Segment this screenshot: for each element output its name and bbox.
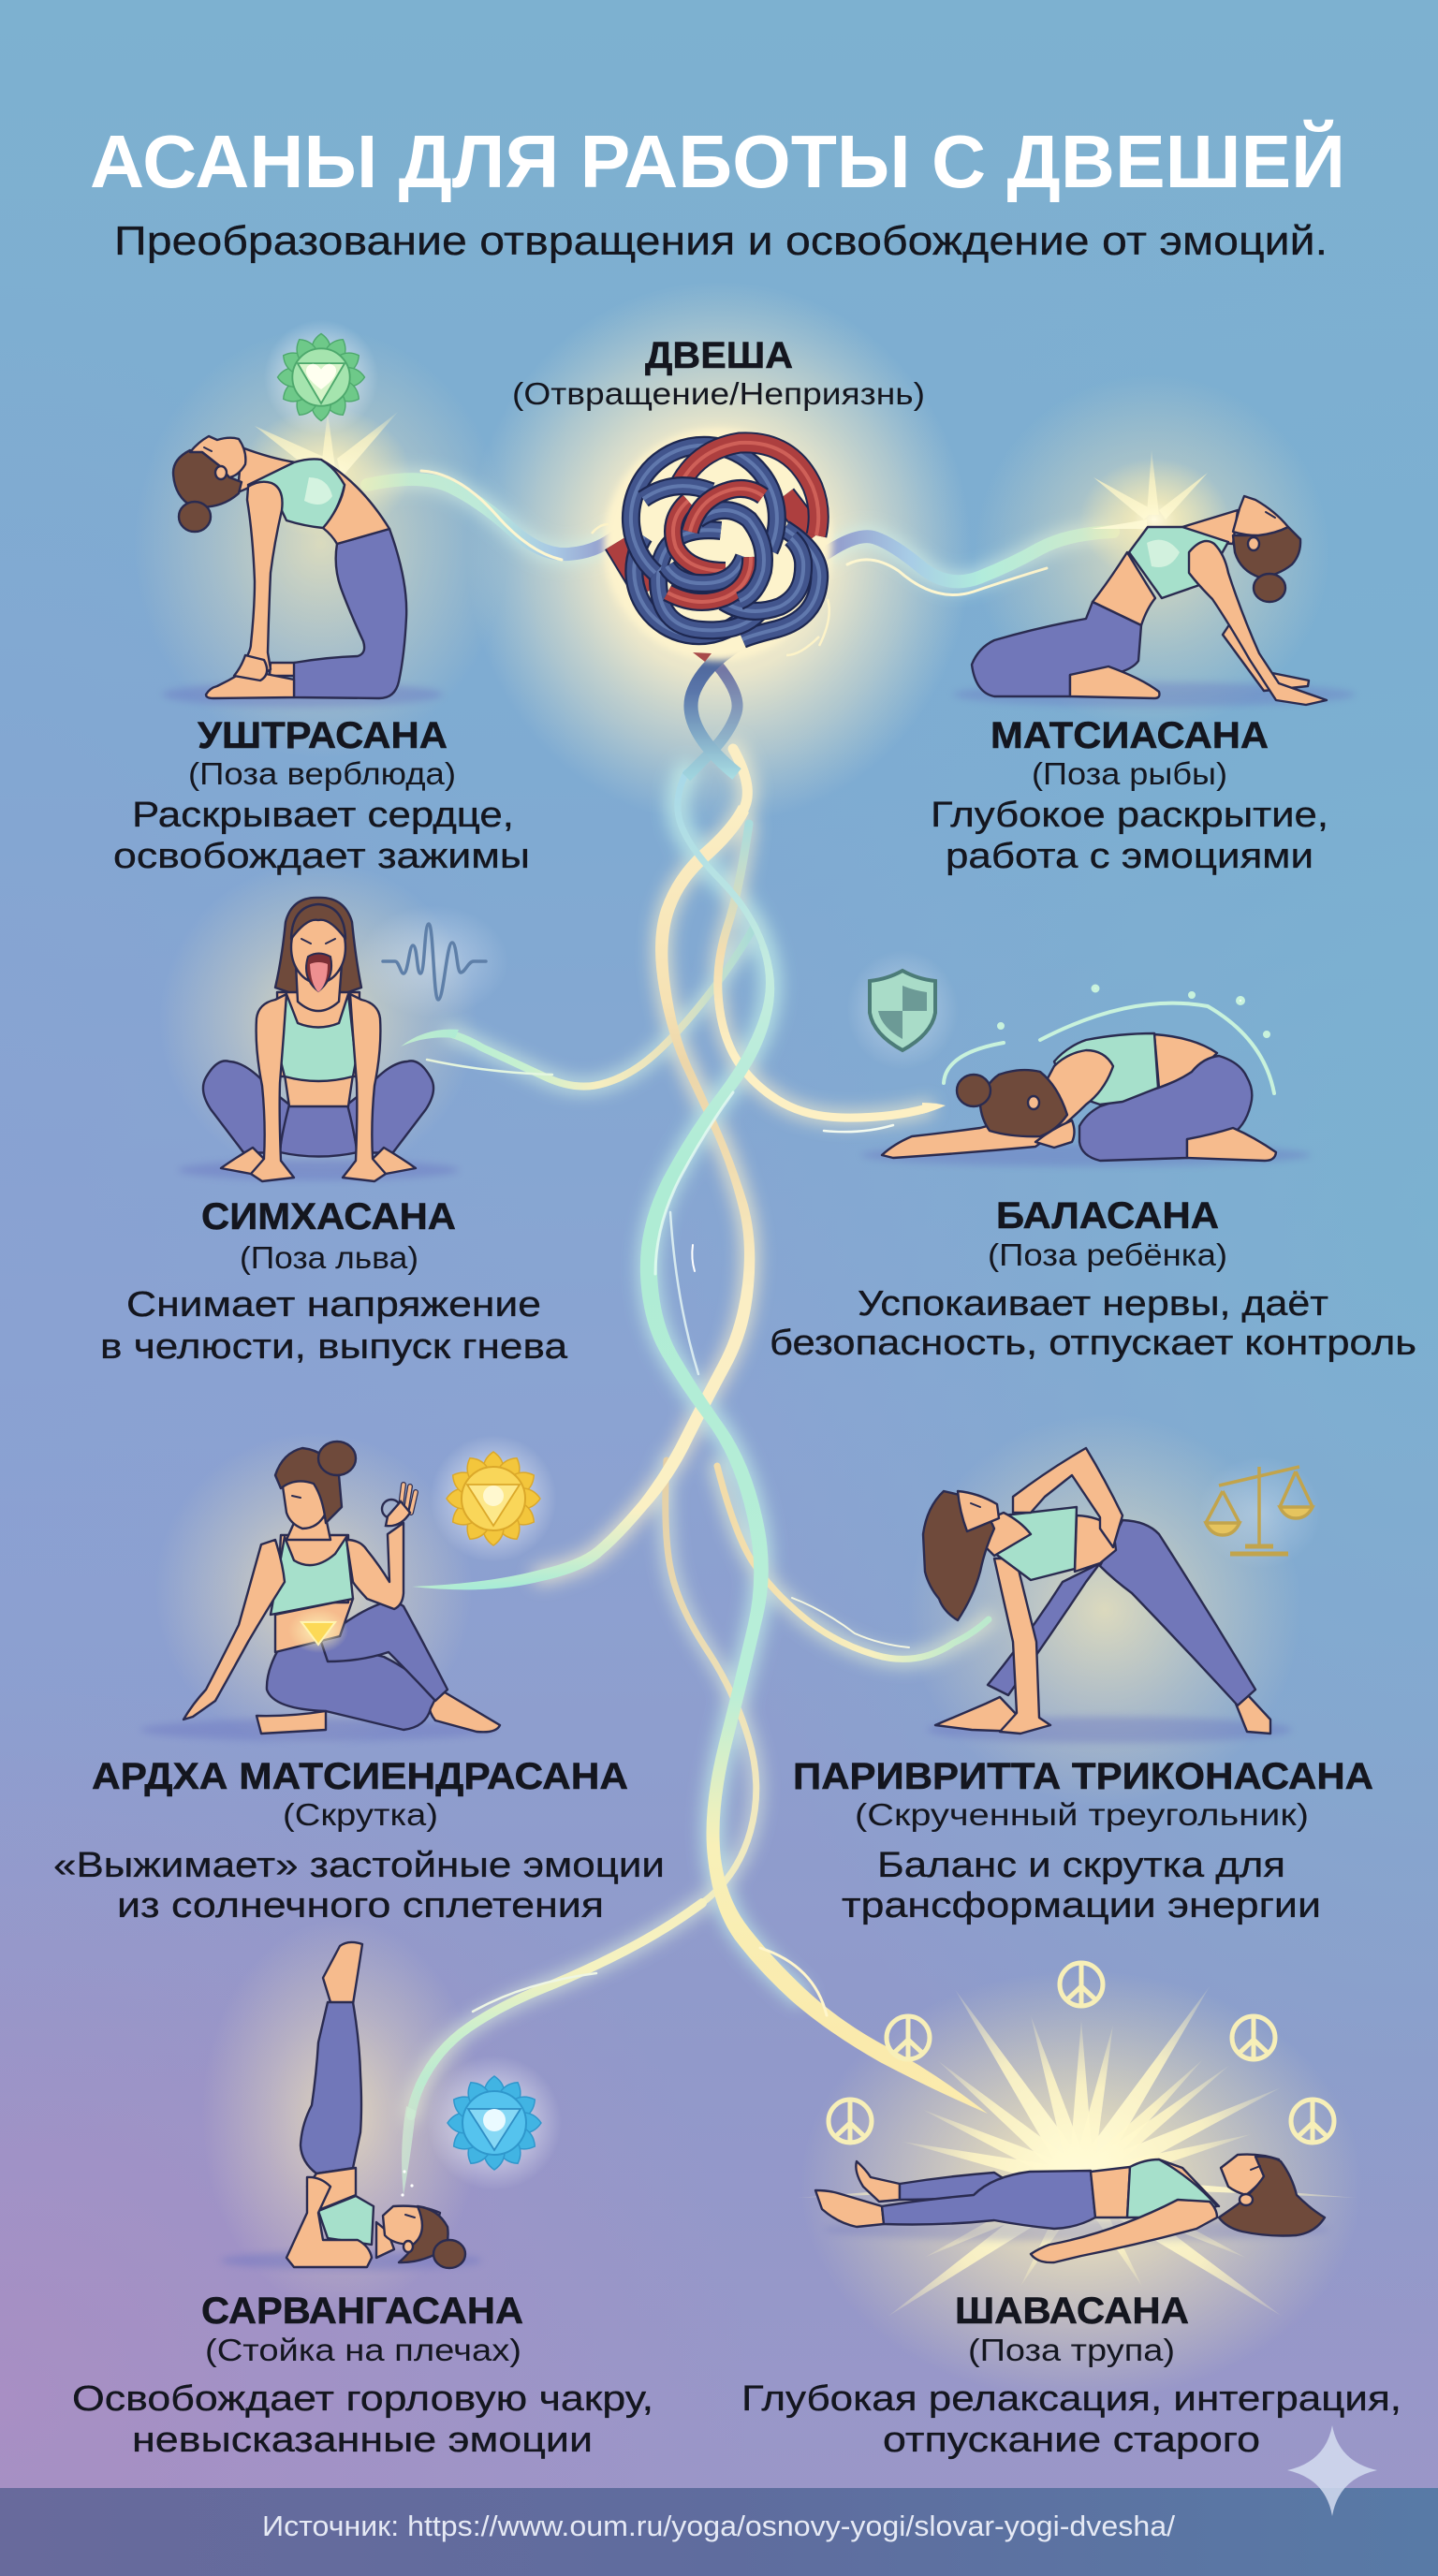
radiant burst [796, 1970, 1362, 2401]
label [72, 2291, 653, 2460]
energy ribbons connecting the knot to every pose [367, 471, 1113, 2195]
Dvesha heading [512, 335, 925, 411]
source line: Источник: https://www.oum.ru/yoga/osnovy-yogi/slovar-yogi-dvesha/ [262, 2510, 1175, 2542]
figure glow [908, 1413, 1301, 1807]
label: освобождает зажимы [113, 837, 530, 876]
icon: peace symbols [829, 1963, 1334, 2143]
label: Баланс и скрутка для [877, 1846, 1285, 1885]
knot strands below the knot [686, 618, 796, 777]
panel: Simhasana [100, 861, 568, 1367]
figure: revolved triangle [923, 1448, 1270, 1734]
figure glow [974, 374, 1329, 730]
Dvesha heading: ДВЕША [645, 335, 793, 376]
shadow [220, 2251, 482, 2270]
Dvesha knot [592, 429, 832, 662]
figure: seated twist [183, 1442, 500, 1734]
aura arcs and sparkles [944, 987, 1274, 1093]
glow under ribbons [367, 479, 1113, 2115]
icon: solar plexus chakra [430, 1435, 557, 1562]
shadow [824, 2218, 1329, 2241]
label: САРВАНГАСАНА [201, 2291, 523, 2332]
label: МАТСИАСАНА [990, 715, 1269, 756]
label: трансформации энергии [842, 1886, 1321, 1925]
shadow [140, 1719, 496, 1741]
label: работа с эмоциями [946, 837, 1313, 876]
figure: shoulder stand [286, 1942, 465, 2268]
label: ШАВАСАНА [955, 2291, 1189, 2332]
shadow [927, 1717, 1292, 1743]
panel: Sarvangasana [72, 1919, 653, 2460]
label: (Скрутка) [283, 1797, 438, 1832]
icon: sound wave [359, 905, 508, 1017]
figure glow [154, 1432, 473, 1750]
label: АРДХА МАТСИЕНДРАСАНА [92, 1756, 628, 1797]
ribbon to Parivritta [717, 1466, 989, 1659]
label: отпускание старого [883, 2421, 1260, 2460]
panel: Balasana [770, 950, 1416, 1363]
label: (Поза льва) [240, 1240, 418, 1275]
label [793, 1756, 1373, 1925]
shadow [953, 682, 1356, 707]
central knot glow [466, 281, 972, 824]
label [53, 1756, 665, 1925]
label: (Поза ребёнка) [988, 1237, 1227, 1272]
panel: Shavasana [741, 1963, 1401, 2460]
label: безопасность, отпускает контроль [770, 1324, 1416, 1363]
figure: fish pose [972, 496, 1327, 705]
icon: scales [1198, 1456, 1322, 1569]
label [770, 1195, 1416, 1363]
label: из солнечного сплетения [117, 1886, 604, 1925]
label [741, 2291, 1401, 2460]
label: Снимает напряжение [126, 1285, 541, 1325]
icon: shield [846, 950, 959, 1070]
label: Глубокое раскрытие, [931, 796, 1328, 835]
panel: Parivritta Trikonasana [793, 1413, 1373, 1925]
label: невысказанные эмоции [132, 2421, 593, 2460]
main cream ribbon to Ardha Matsyendrasana [412, 749, 755, 1589]
label: УШТРАСАНА [198, 715, 448, 756]
ribbon from knot to Matsyasana [822, 532, 1113, 595]
Dvesha heading: (Отвращение/Неприязнь) [512, 376, 925, 411]
figure glow [159, 861, 477, 1179]
panel: Ardha Matsyendrasana [53, 1432, 665, 1925]
figure: lion pose [203, 898, 433, 1181]
icon: throat chakra [427, 2056, 562, 2190]
subtitle: Преобразование отвращения и освобождение от эмоций. [114, 218, 1328, 264]
footer band [0, 2488, 1438, 2576]
label: (Стойка на плечах) [205, 2333, 521, 2367]
ribbon from knot to Ushtrasana [367, 471, 617, 560]
label: (Скрученный треугольник) [855, 1797, 1309, 1832]
label: (Поза верблюда) [188, 756, 456, 791]
label: СИМХАСАНА [201, 1196, 456, 1237]
label: ПАРИВРИТТА ТРИКОНАСАНА [793, 1756, 1373, 1797]
panel: Matsyasana [931, 374, 1356, 876]
title: АСАНЫ ДЛЯ РАБОТЫ С ДВЕШЕЙ [90, 119, 1345, 203]
label [931, 715, 1328, 876]
label: в челюсти, выпуск гнева [100, 1327, 568, 1367]
label: Освобождает горловую чакру, [72, 2379, 653, 2419]
figure: corpse pose [815, 2155, 1325, 2262]
icon: heart chakra [264, 320, 378, 434]
sparkle trail [401, 2170, 414, 2197]
ribbon to Simhasana [401, 926, 755, 1087]
figure: camel pose [173, 436, 406, 698]
label [100, 1196, 568, 1367]
label: Успокаивает нервы, даёт [858, 1284, 1328, 1324]
label [113, 715, 530, 876]
label: (Поза трупа) [968, 2333, 1175, 2367]
figure: child pose [882, 1033, 1276, 1161]
label: Глубокая релаксация, интеграция, [741, 2379, 1401, 2419]
shadow [162, 682, 443, 707]
sparkle watermark [1287, 2425, 1377, 2516]
ribbon to Balasana [718, 824, 946, 1132]
main mint ribbon to Shavasana [640, 772, 988, 2114]
label: БАЛАСАНА [996, 1195, 1219, 1237]
panel: Ushtrasana [113, 320, 530, 876]
ribbon to Sarvangasana [402, 1460, 756, 2195]
label: (Поза рыбы) [1032, 756, 1227, 791]
figure glow [134, 328, 508, 758]
label: Раскрывает сердце, [132, 796, 514, 835]
label: «Выжимает» застойные эмоции [53, 1846, 665, 1885]
figure glow [201, 1919, 482, 2312]
shadow [178, 1160, 459, 1180]
shadow [861, 1144, 1311, 1166]
